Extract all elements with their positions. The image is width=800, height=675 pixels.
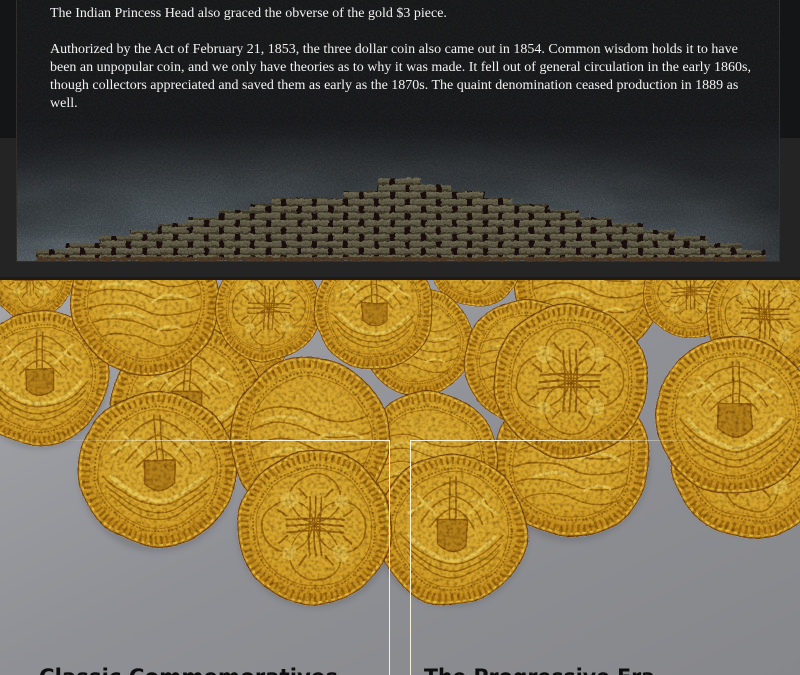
text block: three dollar coin history: well. <box>50 96 78 111</box>
text block: three dollar coin history: though collectors appreciated and saved them as early as the 1870s. The quaint denomination ceased production in 1889 as <box>50 78 738 93</box>
coin shadows <box>0 386 650 608</box>
text block: three dollar coin history: The Indian Princess Head also graced the obverse of the gold $3 piece. <box>50 6 447 21</box>
text block: three dollar coin history: Authorized by the Act of February 21, 1853, the three dollar coin also came out in 1854. Common wisdom holds it to have <box>50 42 738 57</box>
background: dark top band <box>0 0 800 280</box>
text block: three dollar coin history <box>50 6 751 111</box>
text block: three dollar coin history: been an unpopular coin, and we only have theories as to why it was made. It fell out of general circulation in the early 1860s, <box>50 60 751 75</box>
right card outline <box>410 440 710 675</box>
left card outline <box>50 440 390 675</box>
photo: gold coins on grey surface <box>0 280 800 675</box>
panel: textured dark panel with gold bars <box>16 0 780 262</box>
gold bar pyramid <box>36 178 765 261</box>
coin pile <box>0 280 800 606</box>
